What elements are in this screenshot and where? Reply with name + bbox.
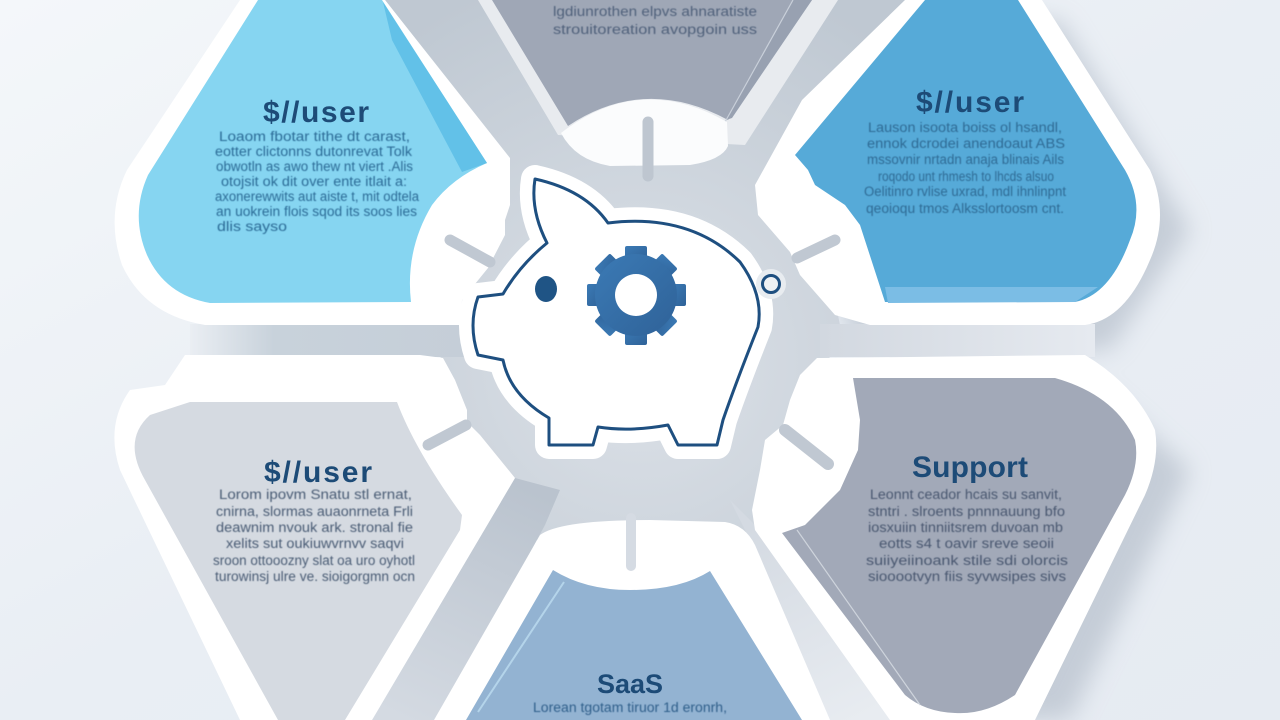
bottom right text: eotts s4 t oavir sreve seoii — [879, 536, 1054, 551]
top right fill — [795, 0, 1136, 302]
bottom left text — [213, 487, 415, 584]
bottom right tick — [785, 430, 828, 464]
left channel band — [190, 324, 470, 357]
bottom right title: Support — [912, 451, 1028, 484]
bottom left text: turowinsj ulre ve. sioigorgmn ocn — [215, 569, 415, 584]
central hub and channels — [385, 0, 915, 540]
top left text: eotter clictonns dutonrevat Tolk — [215, 144, 412, 159]
top right text — [864, 120, 1066, 216]
bottom left text: cnirna, slormas auaonrneta Frli — [216, 504, 413, 519]
piggy tail — [756, 269, 786, 299]
top right text: mssovnir nrtadn anaja blinais Ails — [867, 152, 1064, 167]
top panel edge highlight — [725, 0, 793, 122]
panel shadows — [790, 20, 1190, 720]
panel: top right — [755, 0, 1160, 325]
top right text: qeoioqu tmos Alksslortoosm cnt. — [866, 201, 1064, 216]
panel: bottom — [434, 518, 830, 720]
top left text: otojsit ok dit over ente itlait a: — [221, 174, 407, 189]
bottom panel white frame — [434, 520, 830, 720]
bottom panel edge highlight — [478, 582, 564, 712]
top right title: $//user — [916, 86, 1024, 119]
bottom right text: stntri . slroents pnnnauung bfo — [868, 504, 1065, 519]
bottom right text: Leonnt ceador hcais su sanvit, — [870, 487, 1062, 502]
bottom right text: iosxuiin tinniitsrem duvoan mb — [868, 520, 1063, 535]
top panel right strip — [726, 0, 812, 120]
bottom panel title: SaaS — [597, 669, 663, 699]
top left text — [215, 129, 419, 234]
top panel connector tab — [561, 99, 728, 166]
top panel text: strouitoreation avopgoin uss — [553, 22, 757, 37]
lower right channel — [730, 500, 892, 720]
top left text: Loaom fbotar tithe dt carast, — [219, 129, 410, 144]
top right text: ennok dcrodei anendoaut ABS — [867, 136, 1065, 151]
panel: top left — [115, 0, 510, 325]
bottom panel tick — [626, 518, 636, 566]
top left fill — [139, 0, 487, 303]
bottom right text — [866, 487, 1068, 584]
top panel text — [553, 4, 757, 37]
top panel fill — [492, 0, 812, 126]
top left tick — [450, 240, 490, 262]
bottom left fill — [135, 402, 462, 720]
bottom panel fill — [466, 570, 802, 720]
right channel band — [820, 324, 1095, 357]
piggy white halo — [473, 179, 759, 445]
bottom right text: suiiyeiinoank stile sdi olorcis — [866, 553, 1068, 568]
panel: bottom right — [752, 355, 1156, 720]
bottom left text: sroon ottooozny slat oa uro oyhotl — [213, 553, 415, 568]
top right text: Lauson isoota boiss ol hsandl, — [868, 120, 1062, 135]
top right text: roqodo unt rhmesh to lhcds alsuo — [878, 169, 1054, 184]
top left darker strip — [383, 2, 487, 172]
piggy eye — [535, 276, 557, 302]
bottom left white frame — [114, 355, 515, 720]
top right white frame — [755, 0, 1160, 325]
top panel tick — [642, 122, 654, 176]
top left text: obwotln as awo thew nt viert .Alis — [216, 159, 413, 174]
piggy bank icon — [473, 179, 786, 445]
top right tick — [797, 240, 835, 258]
top right text: Oelitinro rvlise uxrad, mdl ihnlinpnt — [864, 184, 1066, 199]
top right lower strip — [885, 287, 1098, 303]
bottom left text: xelits sut oukiuwvrnvv saqvi — [226, 536, 404, 551]
bottom right edge highlight — [797, 530, 920, 705]
bottom left tick — [428, 425, 466, 445]
panel: top — [478, 0, 838, 176]
bottom left text: Lorom ipovm Snatu stl ernat, — [219, 487, 412, 502]
lower left channel — [372, 478, 560, 720]
top left text: dlis sayso — [217, 219, 287, 234]
top left text: axonerewwits aut aiste t, mit odtela — [215, 189, 419, 204]
piggy outline — [473, 179, 759, 445]
panel: bottom left — [114, 355, 515, 720]
icon: gear — [587, 246, 686, 345]
top left title: $//user — [263, 96, 369, 129]
top left white frame — [115, 0, 510, 325]
bottom panel text: Lorean tgotam tiruor 1d eronrh, — [533, 700, 727, 715]
bottom left title: $//user — [264, 456, 372, 489]
bottom right fill — [782, 378, 1136, 713]
bottom right text: siooootvyn fiis syvwsipes sivs — [868, 569, 1066, 584]
top panel frame — [478, 0, 838, 145]
top panel text: lgdiunrothen elpvs ahnaratiste — [553, 4, 757, 19]
bottom left text: deawnim nvouk ark. stronal fie — [216, 520, 413, 535]
top left text: an uokrein flois sqod its soos lies — [216, 204, 417, 219]
bottom right white frame — [752, 355, 1156, 720]
